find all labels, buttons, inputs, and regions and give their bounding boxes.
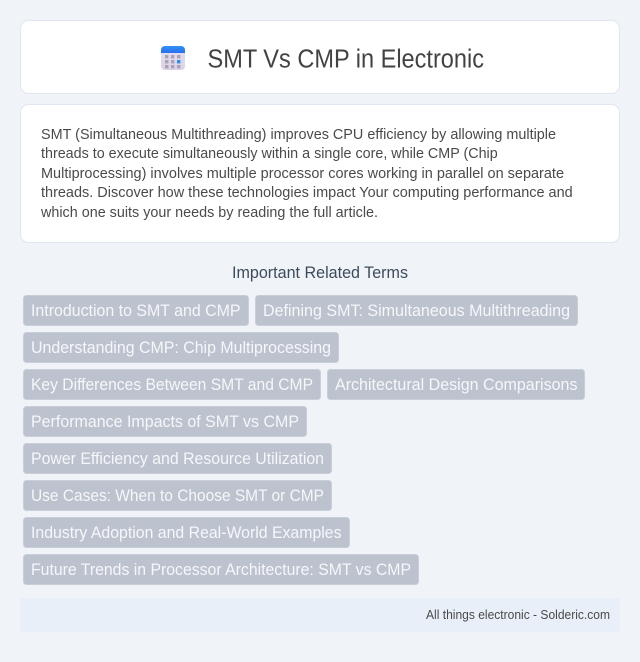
text block: description: which one suits your needs by reading the full article. — [40, 204, 378, 221]
tag: architectural design: Architectural Design Comparisons — [335, 375, 578, 394]
text block: description: threads. Discover how these technologies impact Your computing performance and — [41, 184, 573, 201]
tag: defining SMT — [256, 296, 578, 326]
tag: architectural design — [328, 370, 584, 400]
tag: use cases — [24, 480, 332, 510]
tag: defining SMT: Defining SMT: Simultaneous Multithreading — [263, 301, 570, 320]
tag: understanding CMP — [24, 332, 338, 362]
text block: description: Multiprocessing) involves multiple processor cores working in parallel on separate — [41, 165, 564, 182]
text block: description — [40, 126, 573, 221]
tag list — [24, 296, 584, 584]
tag: key differences — [24, 370, 320, 400]
tag: use cases: Use Cases: When to Choose SMT or CMP — [31, 486, 324, 505]
tag: understanding CMP: Understanding CMP: Chip Multiprocessing — [31, 338, 331, 357]
heading: important related terms: Important Related Terms — [232, 263, 408, 282]
icon: calendar — [161, 46, 185, 70]
tag: performance impacts — [24, 406, 306, 436]
tag: power efficiency: Power Efficiency and Resource Utilization — [31, 449, 324, 468]
footer — [20, 598, 620, 632]
footer text: All things electronic - Solderic.com — [426, 608, 610, 622]
text block: description: threads to execute simultaneously within a single core, while CMP (Chip — [41, 145, 498, 162]
tag: introduction — [24, 296, 248, 326]
tag: industry adoption — [24, 518, 350, 548]
tag: key differences: Key Differences Between SMT and CMP — [31, 375, 313, 394]
tag: introduction: Introduction to SMT and CMP — [31, 301, 240, 320]
tag: future trends: Future Trends in Processor Architecture: SMT vs CMP — [31, 560, 411, 579]
tag: performance impacts: Performance Impacts of SMT vs CMP — [31, 412, 299, 431]
tag: power efficiency — [24, 444, 332, 474]
text block: description: SMT (Simultaneous Multithreading) improves CPU efficiency by allowing multiple — [41, 126, 556, 143]
tag: industry adoption: Industry Adoption and Real-World Examples — [31, 523, 342, 542]
tag: future trends — [24, 554, 418, 584]
panel: header — [20, 20, 620, 94]
panel: description — [20, 104, 620, 242]
title: SMT Vs CMP in Electronic — [208, 46, 484, 74]
